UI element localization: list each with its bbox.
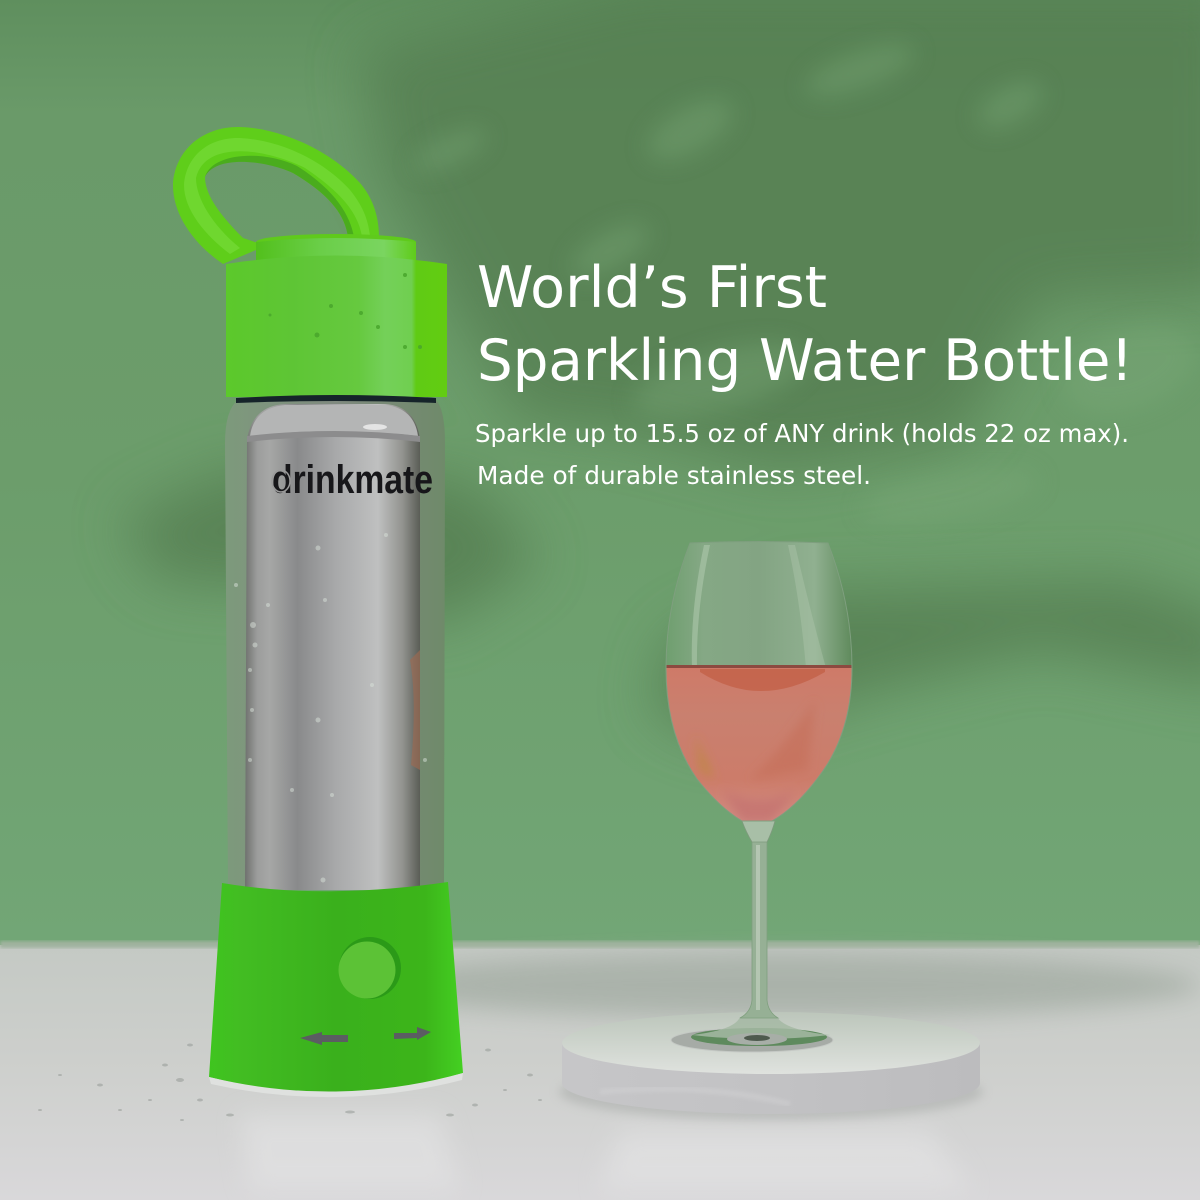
steel inner cylinder [245,404,420,890]
handle inner wall shade [205,156,354,237]
brand logo: drinkmate [272,458,433,502]
description [475,419,1129,490]
left arrow [300,1032,348,1045]
clear bottle sleeve [225,400,445,890]
marble table [0,941,1200,1200]
background wall [0,0,1200,950]
water droplets [214,273,447,1092]
glass bowl [660,542,860,827]
handle upper face highlight [184,138,370,254]
bottle base [209,882,463,1097]
lid [226,234,447,403]
bottle [173,127,463,1097]
description: Made of durable stainless steel. [477,461,871,490]
headline: Sparkling Water Bottle! [477,328,1133,394]
description: Sparkle up to 15.5 oz of ANY drink (holds 22 oz max). [475,419,1129,448]
glass stem [740,838,778,1018]
glass foot [671,1017,833,1052]
headline [477,255,1133,394]
glass knot [742,821,775,842]
right arrow [394,1027,431,1040]
wine glass [660,542,860,1052]
bottle handle loop [173,127,379,264]
coaster [559,1012,983,1120]
headline: World’s First [477,255,827,321]
power button [338,937,401,999]
